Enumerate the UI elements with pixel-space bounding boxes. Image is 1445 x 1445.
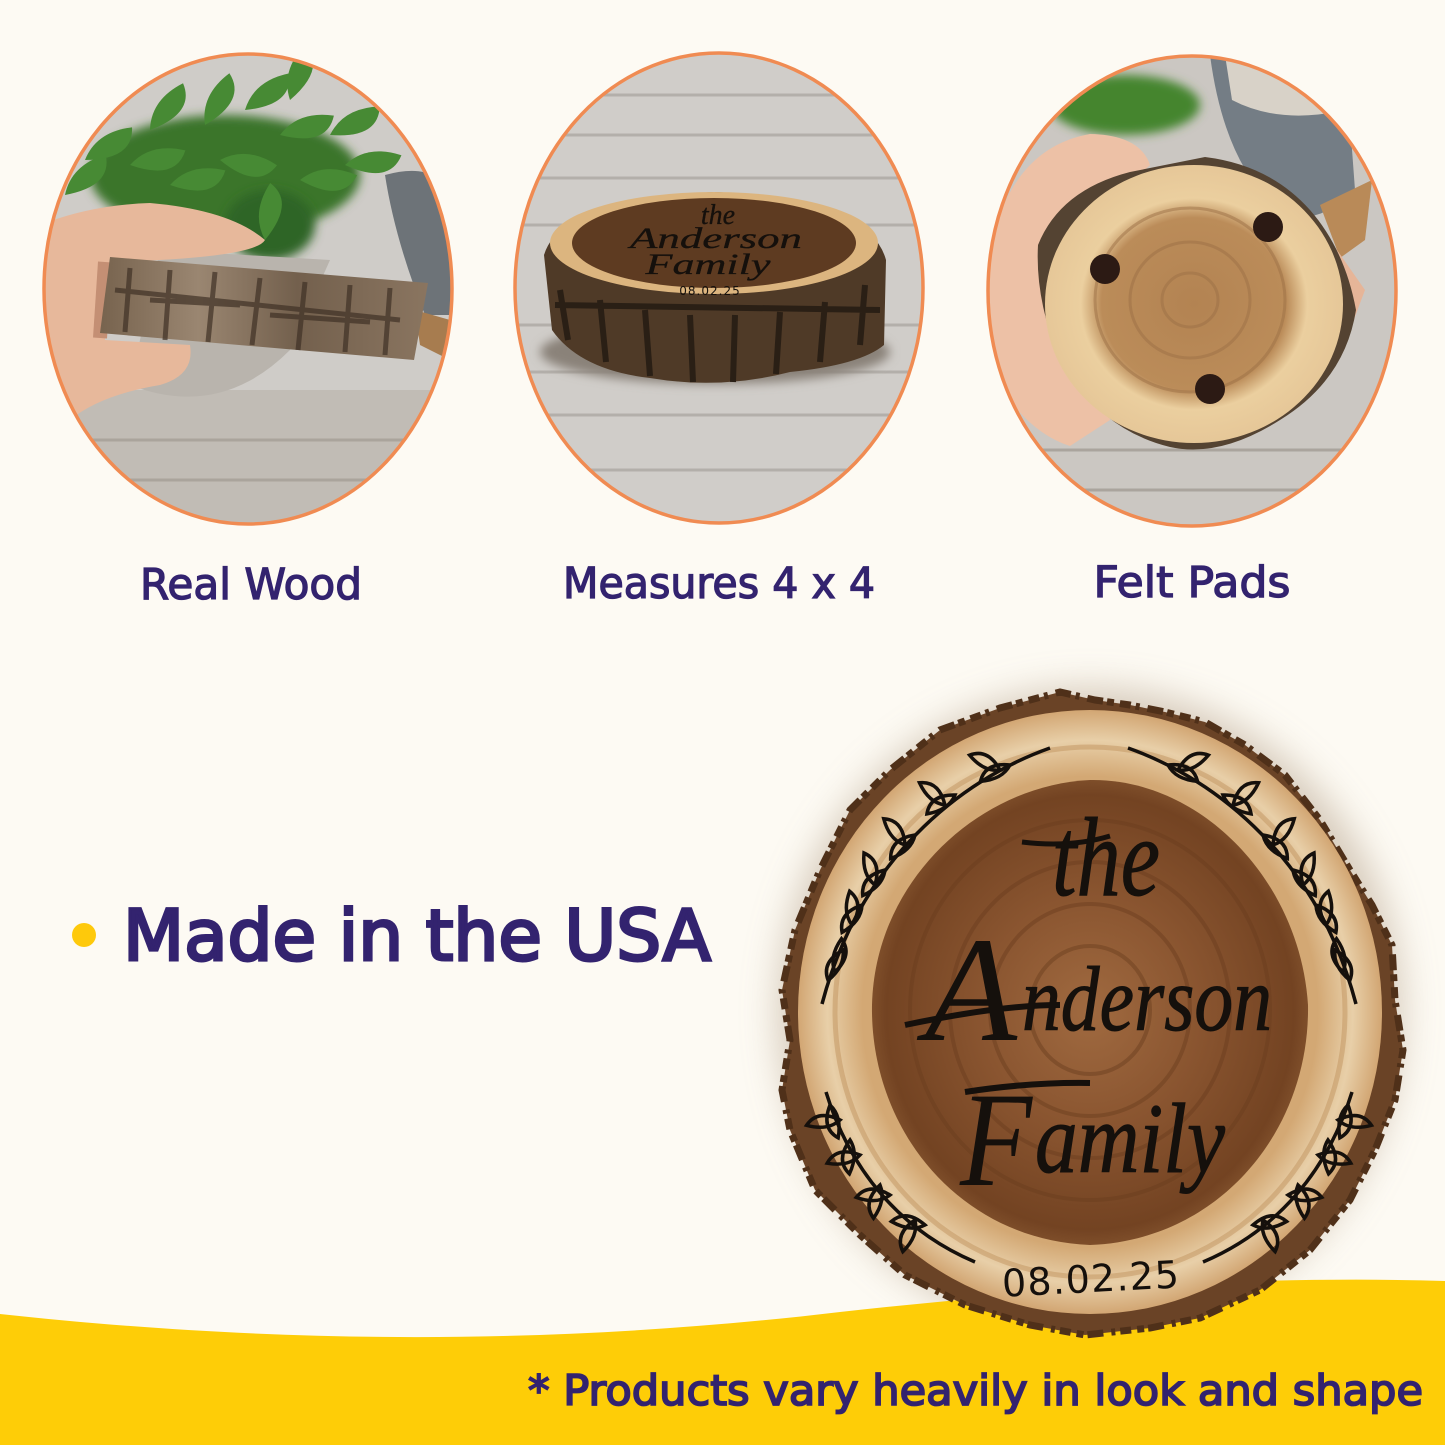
engraved sprig bottom left — [807, 1092, 975, 1262]
caption: measures 4x4: Measures 4 x 4 — [563, 559, 875, 609]
coaster soft shadow — [778, 688, 1402, 1336]
footnote: products vary: * Products vary heavily in look and shape — [528, 1366, 1423, 1415]
caption: felt pads: Felt Pads — [1094, 558, 1290, 608]
engraved text: family — [959, 1066, 1226, 1215]
engraved family name on small coaster: 08.02.25 — [679, 284, 741, 298]
engraved text: the — [1022, 796, 1160, 920]
coaster dark heartwood — [872, 780, 1308, 1245]
engraved family name on small coaster: Anderson — [627, 222, 802, 255]
engraved laurel top right — [1128, 746, 1359, 1004]
engraved family name on small coaster — [627, 200, 802, 298]
feature text: made in the usa: Made in the USA — [123, 895, 711, 977]
engraved family name on small coaster: Family — [644, 248, 771, 281]
coaster pale sapwood — [798, 710, 1382, 1314]
engraved family name on small coaster: the — [701, 200, 735, 231]
photo: felt pads on coaster underside — [985, 50, 1405, 530]
engraved laurel top left — [819, 746, 1050, 1004]
engraved text: anderson: nderson — [1022, 948, 1272, 1050]
engraved text: family: F — [959, 1066, 1033, 1215]
bullet point — [72, 923, 96, 947]
engraved sprig bottom right — [1203, 1092, 1371, 1262]
caption: real wood: Real Wood — [140, 560, 362, 610]
engraved text: the: the — [1052, 796, 1160, 920]
engraved text: anderson: A — [916, 907, 1018, 1073]
photo: coaster measures 4x4 on planks — [510, 50, 930, 530]
large engraved wood coaster — [782, 692, 1403, 1335]
photo: real wood slab held in hand — [40, 45, 460, 530]
engraved date: 08.02.25 — [1001, 1252, 1183, 1306]
engraved text: anderson — [905, 907, 1272, 1073]
coaster bark edge — [782, 692, 1403, 1335]
felt pads — [1090, 212, 1283, 404]
engraved text: family: amily — [1035, 1083, 1226, 1194]
yellow wave footer — [0, 1280, 1445, 1445]
